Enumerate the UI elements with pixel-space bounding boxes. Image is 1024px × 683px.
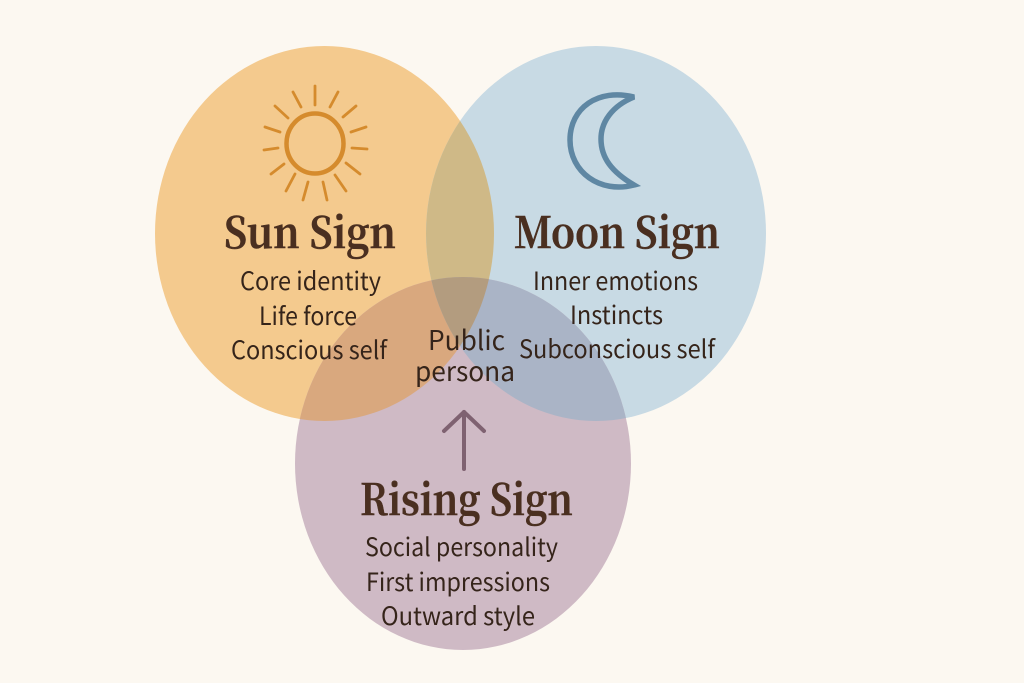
text: moon sign traits: Instincts	[570, 296, 663, 332]
circle: sun sign	[155, 46, 494, 421]
overlap: sun and rising	[300, 280, 460, 421]
text: rising sign traits: Outward style	[381, 597, 535, 633]
text: sun sign traits: Conscious self	[231, 331, 388, 367]
text: rising sign traits	[365, 528, 558, 633]
heading: rising sign: Rising Sign	[360, 467, 573, 528]
icon: sun	[264, 86, 367, 200]
text: sun sign traits: Life force	[259, 297, 357, 333]
text: public persona: Public	[428, 319, 505, 358]
icon: moon	[570, 95, 634, 187]
heading: moon sign: Moon Sign	[514, 200, 720, 261]
text: sun sign traits: Core identity	[240, 262, 381, 298]
text: moon sign traits: Inner emotions	[533, 262, 698, 298]
heading: sun sign: Sun Sign	[224, 200, 396, 261]
arrow: up to public persona	[444, 412, 484, 469]
text: public persona	[415, 319, 515, 389]
venn diagram infographic	[155, 46, 766, 650]
overlap: sun and moon	[426, 121, 494, 280]
overlap: moon and rising	[432, 277, 626, 421]
text: moon sign traits	[519, 262, 716, 366]
circle: rising sign	[295, 277, 631, 650]
text: public persona: persona	[415, 350, 515, 389]
overlap: all three	[432, 277, 489, 346]
text: sun sign traits	[231, 262, 388, 367]
text: moon sign traits: Subconscious self	[519, 330, 716, 366]
text: rising sign traits: Social personality	[365, 528, 558, 564]
circle: moon sign	[426, 46, 766, 421]
text: rising sign traits: First impressions	[366, 563, 550, 599]
